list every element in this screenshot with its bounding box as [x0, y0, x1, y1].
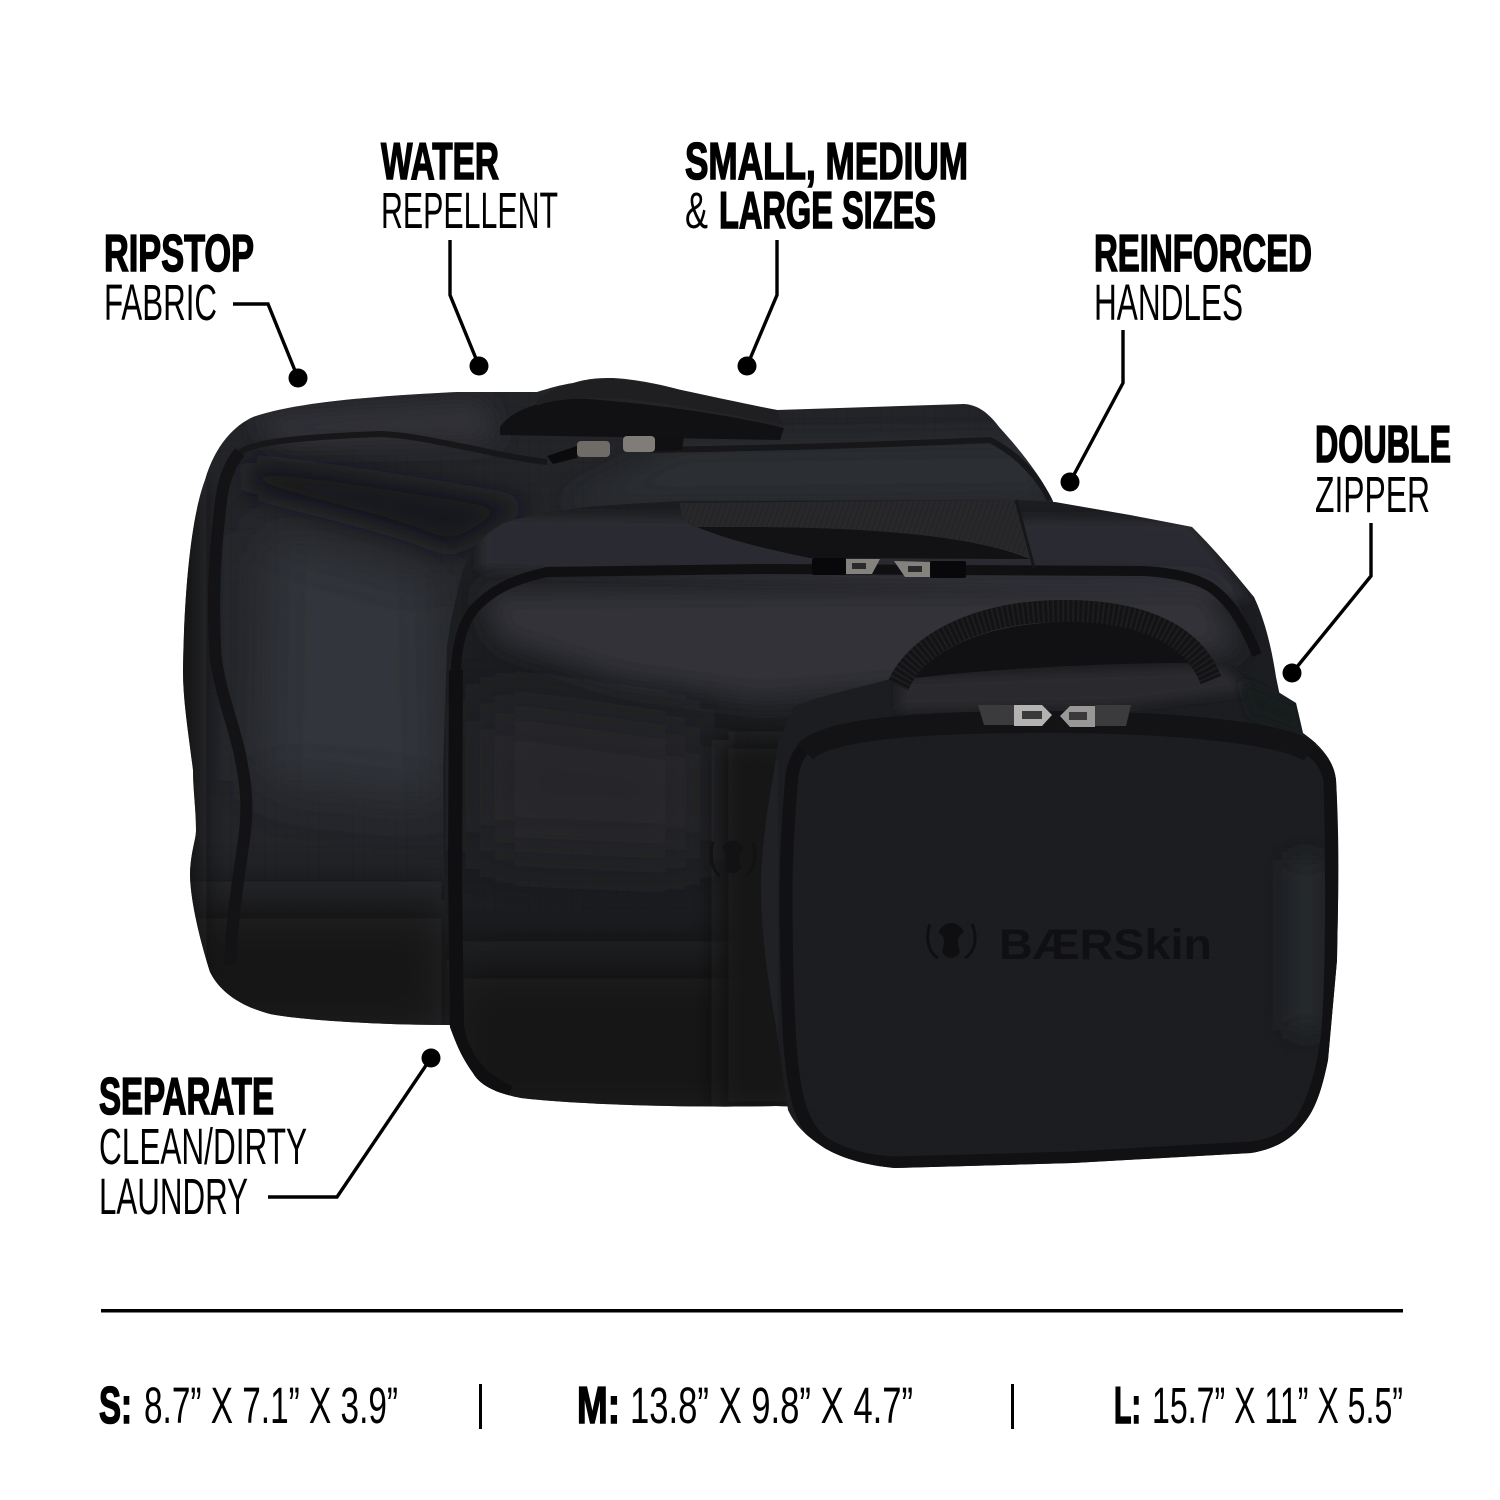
callout: separate laundry: CLEAN/DIRTY	[99, 1118, 307, 1175]
callout: reinforced handles	[1060, 225, 1312, 492]
size S dimensions: 8.7” X 7.1” X 3.9”	[144, 1377, 398, 1434]
callout: ripstop fabric: FABRIC	[104, 274, 217, 331]
brand logo	[928, 921, 1212, 969]
callout: double zipper: ZIPPER	[1315, 466, 1430, 523]
brand logo: BÆRSkin	[999, 921, 1212, 969]
callout: double zipper	[1282, 416, 1451, 682]
callout: ripstop fabric: RIPSTOP	[104, 225, 254, 283]
callout: sizes: SMALL, MEDIUM	[685, 133, 968, 191]
callout: sizes	[685, 133, 968, 376]
small packing cube	[755, 611, 1345, 1175]
small handle hollow	[905, 622, 1210, 690]
callout: separate laundry: LAUNDRY	[99, 1168, 248, 1225]
callout: water repellent	[381, 133, 558, 376]
divider rule	[101, 1309, 1403, 1312]
large zipper	[547, 436, 684, 464]
callout: sizes: LARGE SIZES	[719, 182, 936, 240]
size L dimensions: L:	[1114, 1377, 1141, 1435]
small handle	[898, 611, 1211, 686]
medium zipper	[812, 558, 966, 578]
medium packing cube	[430, 490, 1300, 1130]
medium handle hollow	[687, 522, 1030, 559]
callout: reinforced handles: REINFORCED	[1094, 225, 1312, 283]
callout: water repellent: WATER	[381, 133, 499, 191]
size M dimensions	[577, 1377, 913, 1435]
callout: reinforced handles: HANDLES	[1094, 274, 1243, 331]
large handle	[500, 379, 784, 440]
callout: sizes: &	[685, 182, 708, 239]
size S dimensions: S:	[99, 1377, 132, 1435]
callout: separate laundry	[99, 1048, 440, 1225]
medium bag logo mark	[711, 840, 755, 876]
callout: ripstop fabric	[104, 225, 308, 388]
callout: water repellent: REPELLENT	[381, 182, 558, 239]
large packing cube	[170, 370, 1070, 1050]
callout: separate laundry: SEPARATE	[99, 1068, 274, 1126]
size M dimensions: M:	[577, 1377, 620, 1435]
medium handle	[680, 500, 1034, 568]
size M dimensions: 13.8” X 9.8” X 4.7”	[630, 1377, 913, 1434]
size S dimensions	[99, 1377, 398, 1435]
small zipper	[978, 705, 1131, 727]
size L dimensions	[1114, 1377, 1403, 1435]
